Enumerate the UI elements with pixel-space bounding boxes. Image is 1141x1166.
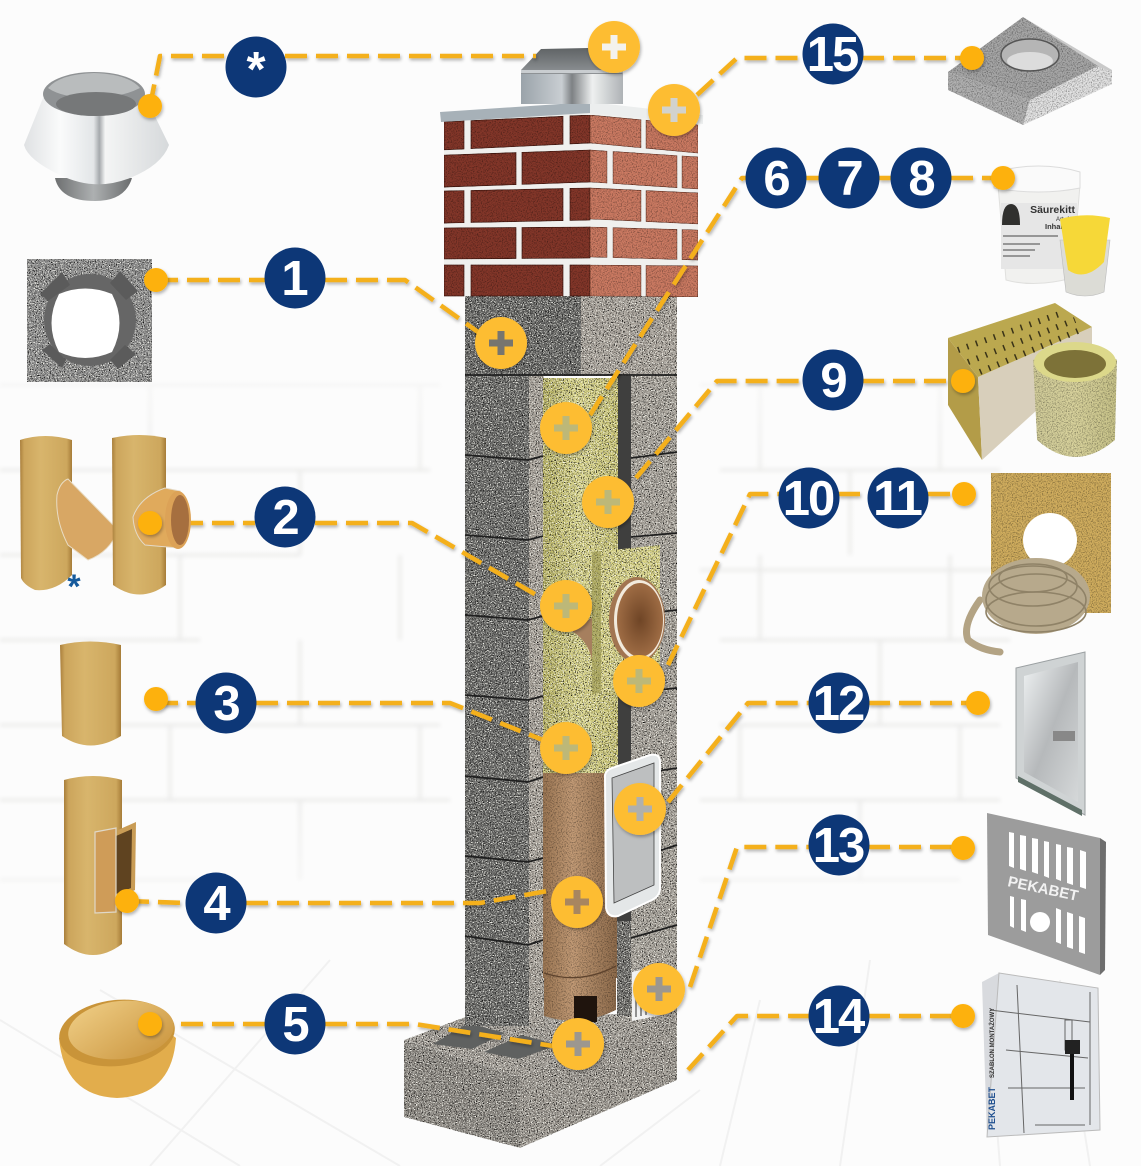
badge: 7: 7 — [836, 152, 862, 206]
connector dots — [115, 46, 1015, 1036]
product 6 7 8: acid putty bucket and sponge: Art.-Nr. — [1056, 217, 1075, 223]
badge: 9 — [802, 350, 864, 410]
leader lines — [127, 56, 1003, 1070]
product 1: concrete block with round flue hole — [27, 259, 152, 382]
product 10 11: cardboard plate with rope seal — [966, 473, 1111, 652]
chimney: concrete block shaft — [465, 296, 677, 1026]
chimney: cleanout door — [605, 755, 660, 916]
badge: asterisk — [226, 36, 286, 98]
product 3: ceramic pipe — [60, 642, 121, 746]
badge: asterisk: * — [246, 43, 266, 97]
badge: 2: 2 — [272, 491, 298, 545]
badge: 8 — [890, 148, 952, 208]
badge: 2 — [254, 486, 316, 548]
chimney: mineral wool insulation — [543, 378, 618, 778]
badge: 7 — [818, 148, 880, 208]
badge: 11: 11 — [873, 472, 922, 526]
chimney: ventilation grate — [632, 965, 662, 1021]
badge: 15: 15 — [807, 28, 858, 82]
product 14: mounting template box — [982, 973, 1100, 1137]
product 14: mounting template box: SZABLON MONTAŻOWY — [989, 1008, 996, 1078]
product 12: steel cleanout door — [1016, 652, 1085, 816]
chimney: base block — [404, 1013, 677, 1148]
chimney: ceramic flue pipe — [543, 773, 617, 1022]
badge: 14: 14 — [813, 990, 865, 1044]
product 14: mounting template box: PEKABET — [987, 1086, 997, 1130]
badge: 10: 10 — [783, 472, 834, 526]
badge: 4: 4 — [203, 877, 230, 931]
badge: 8: 8 — [908, 152, 934, 206]
chimney: tee branch with insulation plate — [570, 545, 665, 694]
chimney: steel flue cap — [521, 48, 623, 104]
product 5: ceramic bowl — [56, 994, 178, 1098]
product 4: ceramic pipe with inlet — [64, 776, 136, 955]
chimney: brick head — [444, 113, 698, 297]
chimney illustration — [404, 48, 703, 1148]
badge: 3: 3 — [213, 677, 239, 731]
product 15: concrete cover slab — [948, 17, 1112, 125]
badge: 6 — [746, 148, 806, 208]
product: steel cowl — [24, 72, 169, 201]
badge: 6: 6 — [763, 152, 789, 206]
badge: 5: 5 — [282, 998, 308, 1052]
badge: 11 — [868, 468, 928, 528]
product 13: steel vent grate: PEKABET — [1006, 873, 1080, 905]
product 6 7 8: acid putty bucket and sponge: Inhalt — [1045, 222, 1066, 231]
chimney: steel cover plate — [440, 102, 703, 124]
badge: 1 — [264, 248, 326, 308]
badge: 9: 9 — [820, 354, 846, 408]
product 9: rock wool block and cylinder — [948, 303, 1117, 460]
product 13: steel vent grate — [987, 813, 1106, 975]
note asterisk: * — [67, 568, 81, 606]
badge: 4 — [186, 872, 246, 934]
badge: 12: 12 — [813, 677, 864, 731]
product 2: ceramic tee pipes — [20, 435, 191, 606]
badge: 5 — [264, 994, 326, 1054]
plus markers on chimney — [475, 21, 700, 1070]
badge: 3 — [196, 672, 256, 734]
badge: 13: 13 — [813, 819, 864, 873]
chimney: base openings — [433, 1023, 558, 1059]
product 6 7 8: acid putty bucket and sponge: Säurekitt — [1030, 204, 1075, 216]
badge: 1: 1 — [281, 252, 307, 306]
product 6 7 8: acid putty bucket and sponge — [994, 166, 1110, 296]
